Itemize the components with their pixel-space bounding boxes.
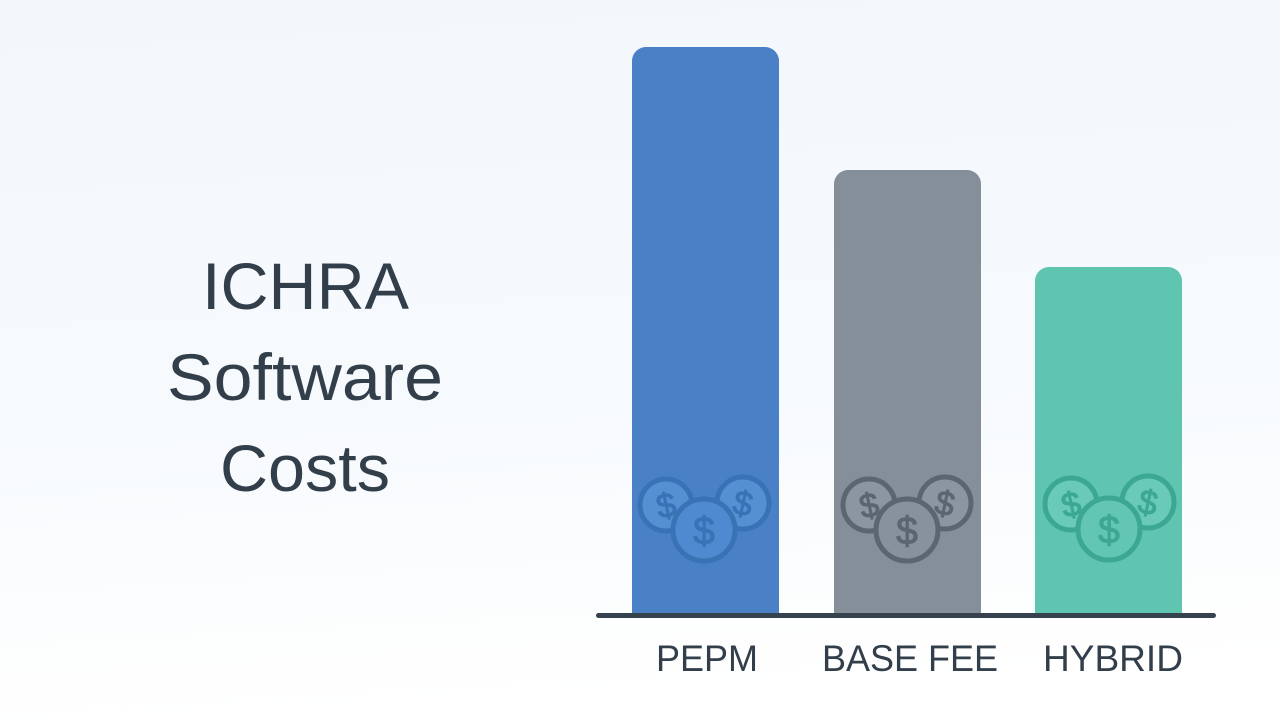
axis labels: BASE FEE	[822, 638, 998, 679]
axis labels: HYBRID	[1043, 638, 1183, 679]
icon: coins on HYBRID bar: $	[1098, 509, 1120, 552]
bar: PEPM	[632, 47, 779, 615]
bar: HYBRID	[1035, 267, 1182, 615]
chart axis	[596, 613, 1216, 618]
title	[167, 249, 443, 505]
icon: coins on PEPM bar	[640, 477, 769, 561]
icon: coins on HYBRID bar: $	[1135, 482, 1161, 524]
icon: coins on BASE FEE bar	[843, 477, 971, 561]
axis labels: PEPM	[656, 638, 758, 679]
icon: coins on HYBRID bar: $	[1058, 484, 1084, 526]
icon: coins on BASE FEE bar: $	[896, 510, 918, 553]
title: ICHRA	[202, 249, 409, 323]
icon: coins on BASE FEE bar: $	[932, 483, 958, 525]
title: Costs	[220, 431, 390, 505]
icon: coins on PEPM bar: $	[693, 510, 715, 553]
icon: coins on PEPM bar: $	[653, 485, 679, 527]
icon: coins on PEPM bar: $	[730, 483, 756, 525]
icon: coins on HYBRID bar	[1045, 476, 1174, 560]
axis labels	[656, 638, 1183, 679]
bar: BASE FEE	[834, 170, 981, 615]
title: Software	[167, 340, 443, 414]
icon: coins on BASE FEE bar: $	[856, 485, 882, 527]
